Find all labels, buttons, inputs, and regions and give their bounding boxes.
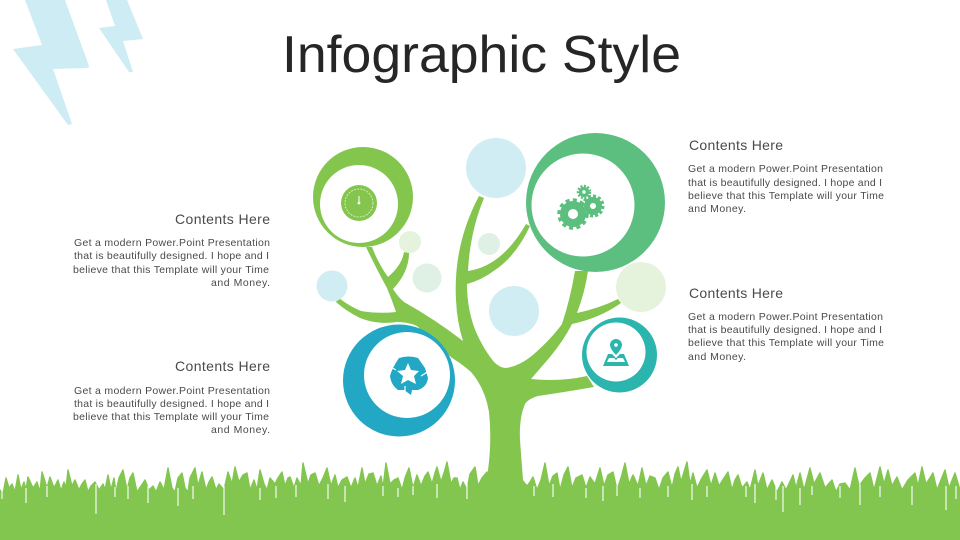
text block: top left: believe that this Template will your Time: [73, 264, 269, 276]
text block: top left: Get a modern Power.Point Presentation: [74, 237, 270, 249]
text block: top left: [73, 211, 270, 289]
text block: bottom left: and Money.: [211, 424, 270, 436]
text block: bottom left: [73, 358, 270, 436]
text block: bottom right: Get a modern Power.Point Presentation: [688, 311, 883, 323]
icon: small lightning bolt: [99, 0, 143, 72]
text block: top right: and Money.: [688, 203, 746, 215]
icon: large lightning bolt: [13, 0, 89, 125]
tree with branches: [336, 196, 621, 500]
title: Infographic Style: [282, 26, 681, 84]
icon: clock: [341, 185, 377, 221]
text block: top right: believe that this Template will your Time: [688, 190, 884, 202]
text block: bottom right: and Money.: [688, 351, 746, 363]
grass: [0, 462, 960, 540]
ring: clock: [313, 147, 413, 247]
icon: recycle: [389, 356, 429, 395]
text block: bottom left: believe that this Template will your Time: [73, 411, 269, 423]
text block: bottom right: Contents Here: [689, 285, 783, 301]
ring: gears: [526, 133, 665, 272]
text block: bottom right: believe that this Template will your Time: [688, 337, 884, 349]
text block: top right: Get a modern Power.Point Presentation: [688, 163, 883, 175]
text block: top left: that is beautifully designed. I hope and I: [74, 250, 269, 262]
ring: recycle: [343, 324, 455, 436]
text block: bottom left: that is beautifully designed. I hope and I: [74, 398, 269, 410]
icon: gears: [559, 186, 603, 228]
text block: bottom right: that is beautifully designed. I hope and I: [688, 324, 882, 336]
text block: top left: Contents Here: [175, 211, 270, 227]
text block: top right: Contents Here: [689, 137, 783, 153]
pale circles: [316, 138, 666, 336]
text block: top right: [688, 137, 884, 215]
text block: top left: and Money.: [211, 277, 270, 289]
text block: bottom left: Contents Here: [175, 358, 270, 374]
text block: bottom left: Get a modern Power.Point Presentation: [74, 385, 270, 397]
ring: map pin: [582, 318, 657, 392]
icon: map pin: [603, 339, 629, 366]
text block: top right: that is beautifully designed. I hope and I: [688, 177, 882, 189]
text block: bottom right: [688, 285, 884, 363]
